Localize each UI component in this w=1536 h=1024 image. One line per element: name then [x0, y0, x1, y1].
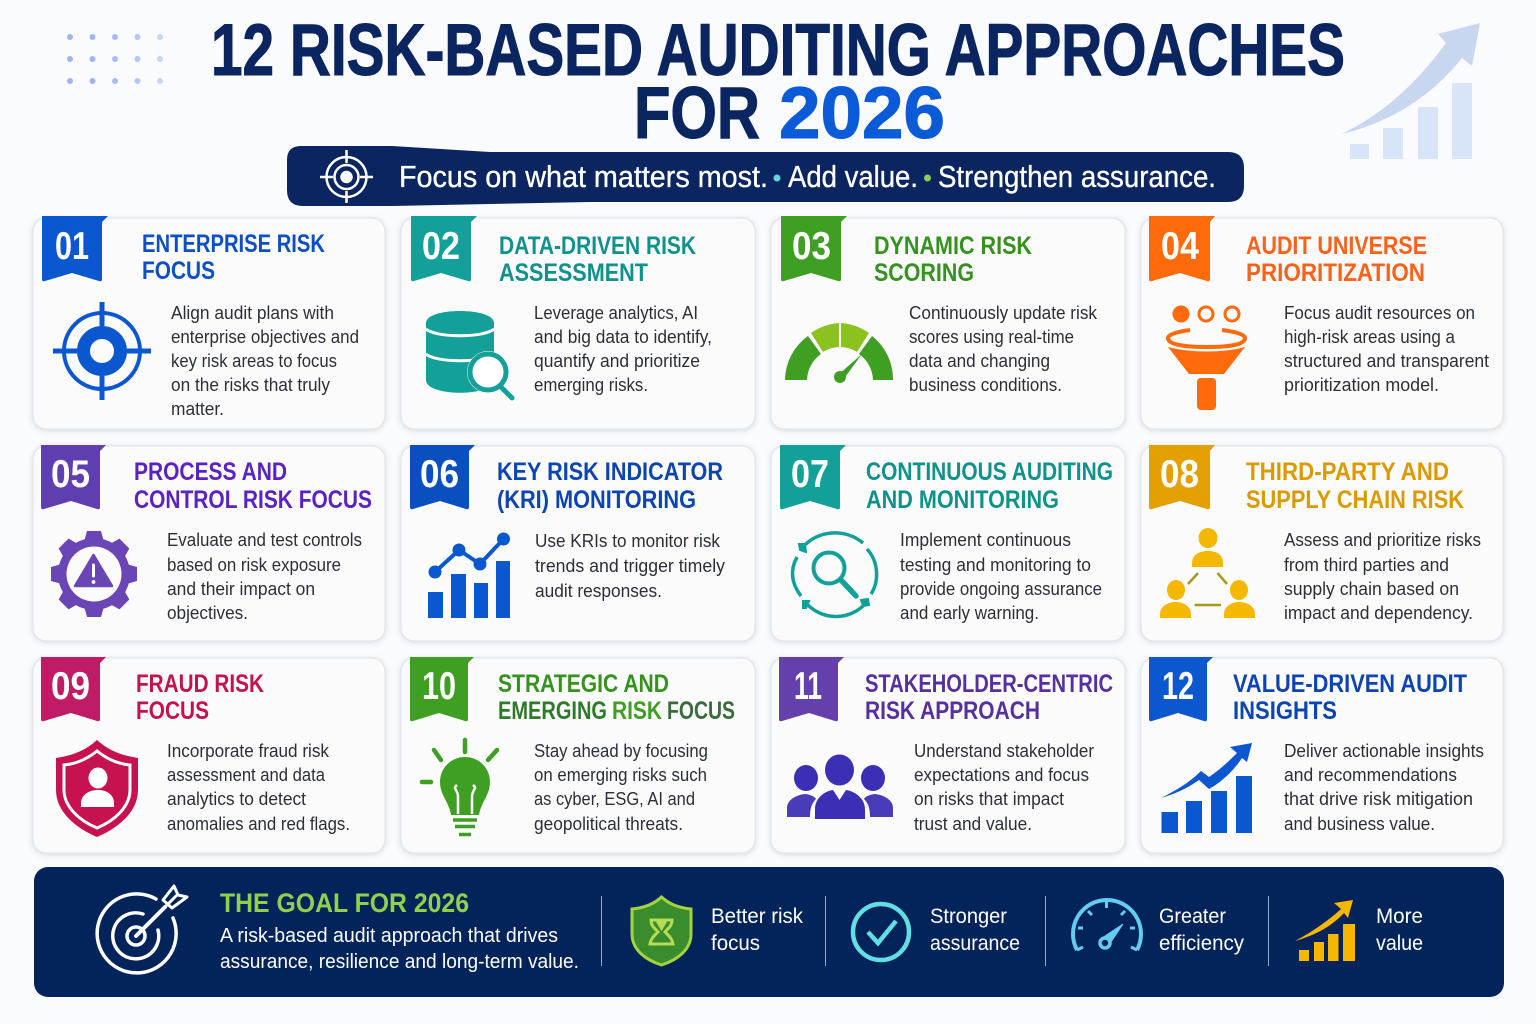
- icon: connected people: [1160, 528, 1255, 618]
- panel: 12 value-driven audit insights: and business value.: [1284, 814, 1435, 834]
- panel: 10 strategic and emerging risk focus: on emerging risks such: [534, 765, 707, 785]
- panel: 06 key risk indicator monitoring: trends and trigger timely: [535, 556, 725, 576]
- panel: 12 value-driven audit insights: Deliver actionable insights: [1284, 741, 1484, 761]
- icon: lightbulb: [422, 740, 497, 834]
- icon: database with magnifier: [426, 311, 512, 398]
- panel: 01 enterprise risk focus: key risk areas to focus: [171, 351, 337, 371]
- text: stronger assurance: assurance: [930, 932, 1020, 955]
- panel: 04 audit universe prioritization: AUDIT UNIVERSE: [1246, 232, 1427, 260]
- subtitle banner: Focus on what matters most.: [399, 159, 768, 194]
- icon: growth chart with arrow: [1342, 23, 1480, 159]
- panel: 01 enterprise risk focus: Align audit plans with: [171, 303, 334, 323]
- panel: 09 fraud risk focus: [33, 657, 385, 853]
- panel: 02 data-driven risk assessment: DATA-DRIVEN RISK: [499, 232, 696, 260]
- panel: 04 audit universe prioritization: high-risk areas using a: [1284, 327, 1456, 347]
- panel: 07 continuous auditing and monitoring: Implement continuous: [900, 530, 1071, 550]
- text: greater efficiency: Greater: [1159, 905, 1226, 928]
- text: better risk focus: [711, 905, 803, 955]
- panel: 12 value-driven audit insights: INSIGHTS: [1233, 697, 1337, 725]
- panel: 02 data-driven risk assessment: [401, 216, 755, 429]
- panel: 01 enterprise risk focus: [33, 216, 385, 429]
- panel: 03 dynamic risk scoring: data and changing: [909, 351, 1050, 371]
- panel: 10 strategic and emerging risk focus: FOCUS: [667, 697, 735, 725]
- panel: 05 process and control risk focus: Evaluate and test controls: [167, 530, 362, 550]
- panel: 07 continuous auditing and monitoring: AND MONITORING: [866, 486, 1059, 514]
- icon: green shield: [632, 897, 691, 965]
- panel: 05 process and control risk focus: objectives.: [167, 603, 248, 623]
- panel: 04 audit universe prioritization: prioritization model.: [1284, 375, 1439, 395]
- panel: 12 value-driven audit insights: [1141, 657, 1503, 853]
- panel: 09 fraud risk focus: 09: [51, 665, 90, 708]
- text: more value: [1376, 905, 1423, 955]
- goal description: assurance, resilience and long-term value.: [220, 951, 579, 973]
- panel: 11 stakeholder-centric risk approach: trust and value.: [914, 814, 1032, 834]
- panel: 12 value-driven audit insights: VALUE-DRIVEN AUDIT: [1233, 670, 1467, 698]
- panel: 07 continuous auditing and monitoring: CONTINUOUS AUDITING: [866, 458, 1113, 486]
- panel: 09 fraud risk focus: FRAUD RISK: [136, 670, 264, 698]
- panel: 08 third-party and supply chain risk: supply chain based on: [1284, 579, 1459, 599]
- panel: 08 third-party and supply chain risk: impact and dependency.: [1284, 603, 1473, 623]
- panel: 05 process and control risk focus: PROCESS AND: [134, 458, 287, 486]
- icon: funnel: [1168, 306, 1245, 410]
- panel: 10 strategic and emerging risk focus: STRATEGIC AND: [498, 670, 669, 698]
- panel: 07 continuous auditing and monitoring: provide ongoing assurance: [900, 579, 1102, 599]
- panel: 01 enterprise risk focus: enterprise objectives and: [171, 327, 359, 347]
- panel: 10 strategic and emerging risk focus: Stay ahead by focusing: [534, 741, 708, 761]
- icon: group of people: [787, 754, 893, 819]
- panel: 04 audit universe prioritization: PRIORITIZATION: [1246, 259, 1425, 287]
- icon: magnifier in cycle: [792, 533, 877, 616]
- panel: 05 process and control risk focus: 05: [51, 453, 90, 496]
- panel: 05 process and control risk focus: based on risk exposure: [167, 555, 341, 575]
- panel: 01 enterprise risk focus: on the risks that truly: [171, 375, 330, 395]
- panel: 08 third-party and supply chain risk: THIRD-PARTY AND: [1246, 458, 1449, 486]
- panel: 08 third-party and supply chain risk: [1141, 445, 1503, 641]
- panel: goal footer: [34, 867, 1504, 997]
- subtitle banner: Strengthen assurance.: [938, 159, 1216, 194]
- text: greater efficiency: [1159, 905, 1244, 955]
- text: stronger assurance: [930, 905, 1020, 955]
- icon: gear with warning: [51, 531, 137, 617]
- panel: 03 dynamic risk scoring: [771, 216, 1125, 429]
- decorative dot grid: [67, 34, 163, 84]
- panel: 08 third-party and supply chain risk: Assess and prioritize risks: [1284, 530, 1481, 550]
- panel: 08 third-party and supply chain risk: SUPPLY CHAIN RISK: [1246, 486, 1464, 514]
- panel: 10 strategic and emerging risk focus: EMERGING: [498, 697, 607, 725]
- panel: 03 dynamic risk scoring: SCORING: [874, 259, 974, 287]
- panel: 03 dynamic risk scoring: 03: [792, 225, 831, 268]
- panel: 09 fraud risk focus: Incorporate fraud risk: [167, 741, 330, 761]
- text: stronger assurance: Stronger: [930, 905, 1007, 928]
- panel: 09 fraud risk focus: FOCUS: [136, 697, 209, 725]
- panel: 12 value-driven audit insights: and recommendations: [1284, 765, 1457, 785]
- text: better risk focus: Better risk: [711, 905, 803, 928]
- title: 2026: [779, 73, 945, 154]
- panel: 02 data-driven risk assessment: and big data to identify,: [534, 327, 712, 347]
- panel: 03 dynamic risk scoring: DYNAMIC RISK: [874, 232, 1032, 260]
- title: [211, 10, 1345, 154]
- icon: target: [53, 302, 151, 400]
- panel: 12 value-driven audit insights: 12: [1162, 665, 1194, 708]
- goal description: [220, 925, 579, 973]
- panel: 02 data-driven risk assessment: Leverage analytics, AI: [534, 303, 698, 323]
- panel: 10 strategic and emerging risk focus: RISK: [612, 697, 662, 725]
- panel: 09 fraud risk focus: anomalies and red flags.: [167, 814, 350, 834]
- panel: 01 enterprise risk focus: 01: [55, 225, 89, 268]
- icon: shield with person: [56, 740, 138, 837]
- panel: 12 value-driven audit insights: that drive risk mitigation: [1284, 789, 1473, 809]
- panel: 11 stakeholder-centric risk approach: STAKEHOLDER-CENTRIC: [865, 670, 1113, 698]
- panel: 06 key risk indicator monitoring: (KRI) MONITORING: [497, 486, 696, 514]
- panel: 05 process and control risk focus: and their impact on: [167, 579, 315, 599]
- panel: 02 data-driven risk assessment: emerging risks.: [534, 375, 648, 395]
- panel: 06 key risk indicator monitoring: [401, 445, 755, 641]
- panel: 08 third-party and supply chain risk: 08: [1160, 453, 1199, 496]
- panel: 01 enterprise risk focus: ENTERPRISE RISK: [142, 230, 325, 258]
- icon: check circle: [853, 904, 909, 960]
- subtitle banner: Add value.: [788, 159, 918, 194]
- panel: 03 dynamic risk scoring: Continuously update risk: [909, 303, 1098, 323]
- panel: 10 strategic and emerging risk focus: as cyber, ESG, AI and: [534, 789, 695, 809]
- panel: 09 fraud risk focus: analytics to detect: [167, 789, 306, 809]
- panel: 04 audit universe prioritization: structured and transparent: [1284, 351, 1489, 371]
- panel: 06 key risk indicator monitoring: 06: [420, 453, 459, 496]
- panel: 06 key risk indicator monitoring: KEY RISK INDICATOR: [497, 458, 723, 486]
- icon: dart and target: [97, 886, 187, 973]
- panel: 11 stakeholder-centric risk approach: RISK APPROACH: [865, 697, 1040, 725]
- panel: 07 continuous auditing and monitoring: 07: [791, 453, 829, 496]
- panel: 03 dynamic risk scoring: scores using real-time: [909, 327, 1074, 347]
- panel: 01 enterprise risk focus: FOCUS: [142, 257, 215, 285]
- panel: 11 stakeholder-centric risk approach: on risks that impact: [914, 789, 1064, 809]
- panel: 06 key risk indicator monitoring: Use KRIs to monitor risk: [535, 531, 721, 551]
- text: more value: value: [1376, 932, 1423, 955]
- icon: bar chart with trend line: [428, 532, 510, 618]
- panel: 07 continuous auditing and monitoring: testing and monitoring to: [900, 555, 1091, 575]
- icon: banner target: [320, 150, 373, 203]
- icon: speedometer: [1073, 900, 1141, 950]
- panel: 10 strategic and emerging risk focus: geopolitical threats.: [534, 814, 683, 834]
- goal description: A risk-based audit approach that drives: [220, 925, 558, 947]
- text: better risk focus: focus: [711, 932, 760, 955]
- panel: 05 process and control risk focus: CONTROL RISK FOCUS: [134, 486, 372, 514]
- panel: 11 stakeholder-centric risk approach: expectations and focus: [914, 765, 1089, 785]
- panel: 04 audit universe prioritization: 04: [1161, 225, 1199, 268]
- panel: 07 continuous auditing and monitoring: and early warning.: [900, 603, 1039, 623]
- panel: 04 audit universe prioritization: [1141, 216, 1503, 429]
- panel: 06 key risk indicator monitoring: audit responses.: [535, 581, 662, 601]
- panel: 11 stakeholder-centric risk approach: Understand stakeholder: [914, 741, 1094, 761]
- panel: 11 stakeholder-centric risk approach: 11: [794, 665, 822, 708]
- panel: 04 audit universe prioritization: Focus audit resources on: [1284, 303, 1475, 323]
- panel: 02 data-driven risk assessment: quantify and prioritize: [534, 351, 700, 371]
- icon: gauge: [785, 323, 893, 383]
- panel: 02 data-driven risk assessment: 02: [422, 225, 460, 268]
- panel: 11 stakeholder-centric risk approach: [771, 657, 1125, 853]
- panel: 07 continuous auditing and monitoring: [771, 445, 1125, 641]
- panel: 09 fraud risk focus: assessment and data: [167, 765, 326, 785]
- subtitle banner: [287, 146, 1244, 206]
- icon: gold bars with arrow: [1295, 900, 1355, 961]
- panel: 08 third-party and supply chain risk: from third parties and: [1284, 555, 1449, 575]
- text: more value: More: [1376, 905, 1423, 928]
- goal heading: THE GOAL FOR 2026: [220, 888, 469, 918]
- title: FOR: [634, 73, 760, 154]
- icon: rising bars with arrow: [1161, 743, 1252, 833]
- panel: 03 dynamic risk scoring: business conditions.: [909, 375, 1062, 395]
- panel: 10 strategic and emerging risk focus: 10: [422, 665, 456, 708]
- panel: 01 enterprise risk focus: matter.: [171, 399, 224, 419]
- panel: 05 process and control risk focus: [33, 445, 385, 641]
- panel: 02 data-driven risk assessment: ASSESSMENT: [499, 259, 648, 287]
- text: greater efficiency: efficiency: [1159, 932, 1244, 955]
- panel: 10 strategic and emerging risk focus: [401, 657, 755, 853]
